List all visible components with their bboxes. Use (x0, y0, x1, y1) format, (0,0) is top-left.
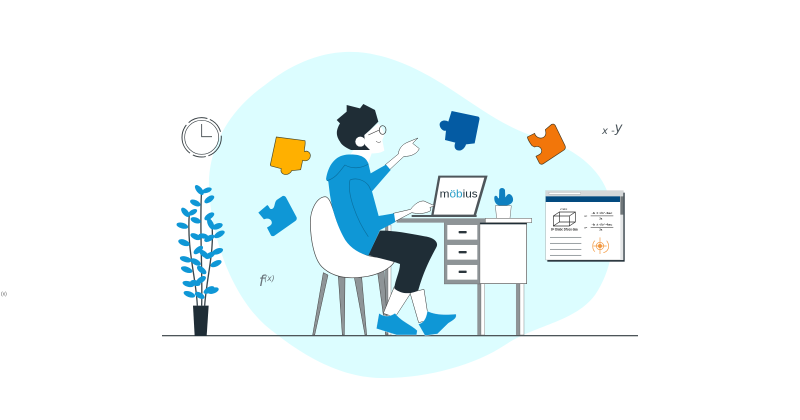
cube labels: v=abc (560, 207, 568, 211)
window shadow (547, 193, 625, 262)
formula one (584, 211, 613, 221)
laptop logo: möbius (440, 188, 478, 200)
chair shell (310, 197, 395, 278)
potted plant (176, 184, 226, 336)
puzzle piece: yellow (270, 137, 310, 175)
scrollbar (620, 196, 623, 260)
person (326, 104, 456, 336)
chair (310, 197, 395, 335)
plant stems (189, 190, 212, 306)
laptop (412, 176, 488, 217)
window frame (546, 191, 623, 260)
formula one: -b ± √b²-4ac (592, 211, 613, 215)
plant leaves (176, 184, 226, 300)
glasses (368, 126, 386, 135)
header band (546, 196, 620, 202)
formula two: -b ± √b²-4ac (592, 222, 613, 226)
scene: desk and person (310, 104, 532, 336)
desk back leg (385, 225, 391, 335)
typing forearm and hand (393, 201, 435, 222)
formula one: 2a (599, 217, 603, 221)
formula two: 2a (599, 228, 603, 232)
pointing arm and hand (385, 138, 419, 170)
title bar (546, 191, 623, 196)
hair (337, 104, 378, 150)
icon: wall clock (182, 118, 221, 157)
desk (397, 218, 532, 335)
puzzle piece: light blue (258, 196, 297, 236)
desk cabinet (479, 223, 527, 284)
shoes (376, 313, 417, 335)
stray formula mark: (x) (1, 292, 7, 298)
drawers (447, 225, 477, 240)
desk top (397, 218, 485, 223)
formula two: x= (584, 227, 588, 230)
orange target diagram (593, 237, 609, 254)
plant pot (193, 306, 209, 336)
puzzle piece: dark blue (440, 111, 480, 151)
desk cactus (494, 188, 513, 218)
puzzle piece: orange (527, 124, 565, 164)
desk front legs (477, 283, 481, 335)
floor line (162, 335, 638, 336)
formula: f(x): (x) (264, 274, 275, 283)
drawer handles (459, 231, 467, 233)
text lines (550, 237, 581, 256)
neck and face (350, 123, 384, 163)
chair legs (313, 273, 328, 335)
formula: x-y: y (614, 121, 623, 136)
math reference window: 8= Diabc Dfcos daa (551, 228, 578, 232)
drawer unit (444, 222, 480, 284)
hoodie (326, 154, 395, 256)
formula: x-y: x - (602, 126, 615, 137)
formula one: x= (584, 215, 588, 218)
hoodie seams (327, 164, 371, 237)
background blob (209, 52, 614, 378)
trousers (368, 231, 437, 293)
math reference window (546, 191, 625, 262)
formula two (584, 222, 613, 232)
ear (355, 137, 365, 147)
cube diagram (553, 212, 575, 226)
formula: f(x): f (259, 272, 264, 290)
smile (376, 141, 381, 142)
socks (383, 287, 411, 317)
